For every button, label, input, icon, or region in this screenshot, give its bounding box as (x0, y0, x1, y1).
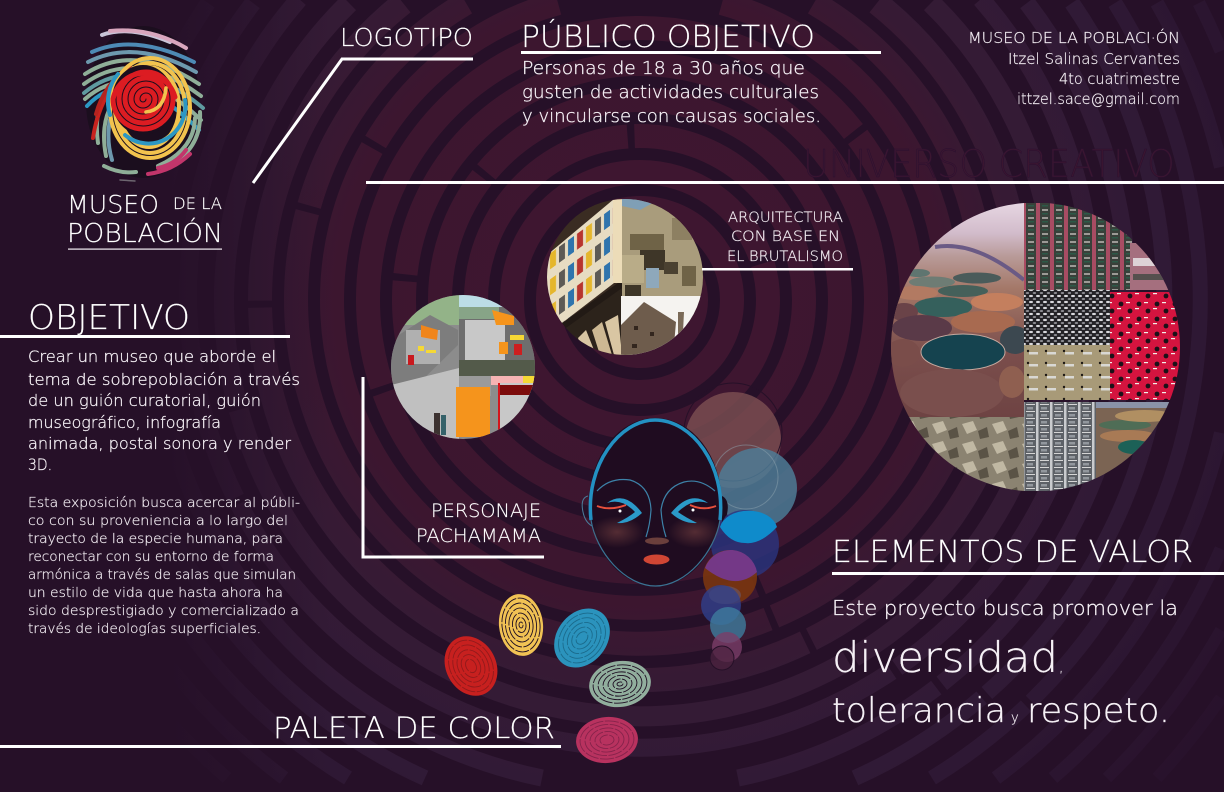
yellow print (496, 592, 546, 658)
text: objetivo (28, 347, 300, 474)
cheeks (590, 516, 644, 548)
towers (1024, 203, 1180, 290)
heading: objetivo (0, 298, 290, 338)
bubbles beside the character (684, 383, 797, 670)
outer ridges (84, 30, 203, 181)
credits: 4to cuatrimestre (1059, 70, 1180, 88)
text: público objetivo: Personas de 18 a 30 años que (522, 58, 805, 79)
text: exposición: Esta exposición busca acercar al públi- (28, 496, 300, 511)
text: exposición: co con su proveniencia a lo largo del (28, 514, 288, 529)
red spiral core (112, 65, 175, 135)
red print (434, 627, 508, 705)
photo circle: 3D render (391, 295, 535, 439)
left building facade (547, 199, 622, 355)
blue print (543, 597, 621, 679)
aerial farmland (886, 203, 1030, 417)
heading: logotipo with connector (253, 23, 473, 183)
eyes (607, 498, 642, 523)
logo wordmark: DE LA (173, 194, 222, 213)
text: público objetivo: y vincularse con causas sociales. (522, 106, 821, 127)
text: objetivo: 3D. (28, 455, 52, 474)
label: arquitectura (702, 210, 853, 270)
credits: Itzel Salinas Cervantes (1008, 50, 1180, 68)
text: elementos de valor: Este proyecto busca promover la (832, 596, 1178, 620)
text: exposición: reconectar con su entorno de forma (28, 550, 274, 565)
photo circle: population collage (886, 203, 1180, 491)
text: público objetivo (522, 58, 821, 127)
photo circle: brutalist architecture (547, 199, 703, 355)
pink print (574, 714, 640, 766)
label: arquitectura: ARQUITECTURA (728, 210, 843, 226)
credits: MUSEO DE LA POBLACI·ÓN (968, 28, 1180, 47)
text: exposición (28, 496, 300, 637)
heading: objetivo: OBJETIVO (28, 298, 190, 338)
green print (586, 657, 654, 711)
text: objetivo: tema de sobrepoblación a través (28, 370, 300, 389)
text: objetivo: animada, postal sonora y render (28, 434, 291, 453)
text: elementos de valor (832, 596, 1178, 731)
character face: Pachamama (582, 418, 728, 586)
text: exposición: un estilo de vida que hasta ahora ha (28, 586, 283, 601)
blue ring segment (125, 100, 185, 144)
text: objetivo: museográfico, infografía (28, 413, 221, 432)
text: elementos de valor: diversidad (832, 633, 1058, 682)
text: elementos de valor: , (1059, 660, 1063, 676)
label: personaje: PACHAMAMA (416, 525, 541, 547)
credits: ittzel.sace@gmail.com (1017, 90, 1180, 108)
nose (645, 538, 669, 544)
label: arquitectura: CON BASE EN (731, 229, 840, 245)
logo wordmark (67, 190, 223, 250)
label: personaje (363, 377, 544, 557)
brows and nose lines (597, 479, 651, 537)
text: objetivo: Crear un museo que aborde el (28, 347, 276, 366)
heading: público objetivo: PÚBLICO OBJETIVO (521, 18, 815, 55)
text: objetivo: de un guión curatorial, guión (28, 391, 261, 410)
lower right tower (621, 296, 703, 355)
text: exposición: trayecto de la especie humana, para (28, 532, 283, 547)
crowd cells (1024, 290, 1180, 400)
yellow rings (110, 58, 190, 158)
text: elementos de valor: tolerancia (832, 691, 1006, 731)
heading: paleta de color: PALETA DE COLOR (273, 711, 555, 745)
text: elementos de valor: y (1011, 711, 1019, 726)
lower cells (909, 402, 1169, 491)
text: elementos de valor: respeto. (1027, 691, 1170, 731)
logo wordmark: MUSEO (67, 190, 159, 219)
logo: multicolour fingerprint (84, 26, 203, 181)
colour palette fingerprints (434, 592, 654, 766)
divider line (366, 181, 1224, 184)
heading: elementos de valor: ELEMENTOS DE VALOR (832, 535, 1193, 570)
lips (644, 554, 670, 564)
label: personaje: PERSONAJE (431, 500, 541, 522)
heading: logotipo with connector: LOGOTIPO (340, 23, 473, 52)
label: arquitectura: EL BRUTALISMO (727, 249, 843, 265)
text: exposición: través de ideologías superficiales. (28, 622, 261, 637)
faint background title: UNIVERSO CREATIVO (803, 142, 1175, 186)
text: público objetivo: gusten de actividades culturales (522, 82, 819, 103)
credits (968, 28, 1180, 108)
text: exposición: sido desprestigiado y comercializado a (28, 604, 299, 619)
heading: paleta de color (0, 711, 561, 748)
ears (582, 496, 592, 526)
logo wordmark: POBLACIÓN (67, 217, 223, 249)
head (590, 418, 722, 586)
upper right building (622, 199, 703, 296)
text: exposición: armónica a través de salas que simulan (28, 568, 296, 583)
